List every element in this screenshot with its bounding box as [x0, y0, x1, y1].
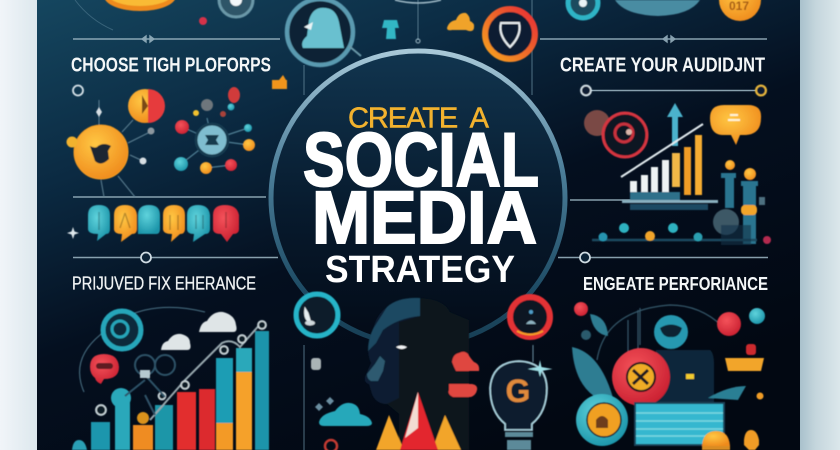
central dark head silhouette	[365, 298, 469, 450]
node dots	[96, 107, 154, 164]
label: top right: CREATE YOUR AUDIDJNT	[560, 54, 765, 76]
icon: light bulb: G	[506, 373, 530, 409]
label: top left: CHOOSE TIGH PLOFORPS	[71, 54, 271, 76]
icon: top teal ring	[568, 0, 598, 18]
icon: light bulb	[490, 345, 552, 450]
icon: sparkle	[67, 227, 79, 239]
network loops	[125, 355, 175, 415]
icon: small line node	[416, 39, 420, 43]
top right bar chart	[621, 124, 718, 210]
icon: gold and red circle	[128, 89, 165, 123]
arch outline	[597, 305, 722, 360]
icon: teal cloud	[319, 403, 372, 426]
icon: top-left orange dish	[104, 0, 176, 11]
right page margin	[800, 0, 840, 450]
red disc	[612, 348, 670, 406]
bulb row shelf	[592, 223, 771, 245]
heading: create a: CREATE A	[348, 102, 490, 134]
icon: orange and red ring with shield	[485, 9, 535, 59]
icon: teal crescent ring	[296, 294, 338, 336]
icon: top centre arc	[395, 0, 441, 3]
red bubble	[717, 312, 741, 336]
label: bottom right: ENGEATE PERFORIANCE	[583, 274, 768, 294]
icon: red dot	[199, 17, 207, 25]
icon: sparkles	[315, 397, 334, 411]
red dot	[574, 302, 588, 316]
central circle badge	[271, 51, 565, 345]
icon: orange speech bubble	[710, 105, 761, 145]
icon: teal up arrow	[667, 103, 683, 146]
icon: gold ring on audience divider	[756, 86, 766, 96]
orange dot	[756, 392, 764, 400]
icon: small outline ring	[73, 86, 83, 96]
node connectors left	[99, 100, 150, 197]
network diagram	[174, 87, 255, 174]
icon: bird magnifier	[287, 0, 361, 65]
icon: small grey glyph	[311, 358, 321, 370]
icon: brown circle	[584, 110, 610, 136]
icon: white cloud small	[161, 334, 191, 350]
label: bottom left: PRIJUVED FIX EHERANCE	[72, 274, 256, 294]
icon: red ring	[510, 297, 550, 337]
torso	[656, 350, 714, 410]
orange bar	[725, 358, 764, 371]
icon: teal figure	[382, 20, 399, 39]
leaves	[572, 314, 615, 405]
icon: white ring on audience divider	[581, 86, 591, 96]
icon: large orange bird circle	[66, 125, 128, 179]
icon: top grey-blue bowl	[615, 0, 700, 16]
orange dome	[702, 431, 730, 446]
small red tag	[746, 344, 756, 355]
small teal dot	[581, 330, 591, 340]
bottom left bar chart	[72, 321, 269, 450]
icon: teal spiral ring	[103, 311, 141, 349]
icon: pillars with coins	[721, 160, 765, 244]
icon: small red glyph	[325, 440, 337, 450]
icon: orange cloud	[447, 13, 474, 31]
icon: grey sphere	[713, 209, 739, 235]
heading: strategy: STRATEGY	[325, 249, 515, 291]
icon: red and orange triangles	[376, 392, 461, 450]
heading: media: MEDIA	[312, 176, 537, 259]
icon: red clouds	[448, 352, 479, 397]
icon: top orange coin	[719, 0, 761, 21]
laptop screen	[634, 402, 725, 446]
heading: social: SOCIAL	[303, 118, 539, 203]
icon: red target ring	[603, 113, 647, 157]
orbit arc	[80, 307, 205, 392]
yellow tag	[686, 374, 694, 379]
orange figure	[744, 430, 759, 450]
teal leaf	[708, 386, 746, 400]
left page margin	[0, 0, 37, 450]
teal bubble	[749, 308, 765, 324]
icon: top grey disc	[219, 0, 253, 17]
icon: white cloud large	[199, 312, 237, 332]
speech bubble row	[88, 205, 239, 242]
icon: orange thumb	[272, 75, 287, 89]
icon: red speech bubble	[90, 354, 119, 384]
teal head	[654, 315, 688, 349]
teal disc	[576, 394, 628, 446]
bottom right scene	[572, 302, 765, 450]
